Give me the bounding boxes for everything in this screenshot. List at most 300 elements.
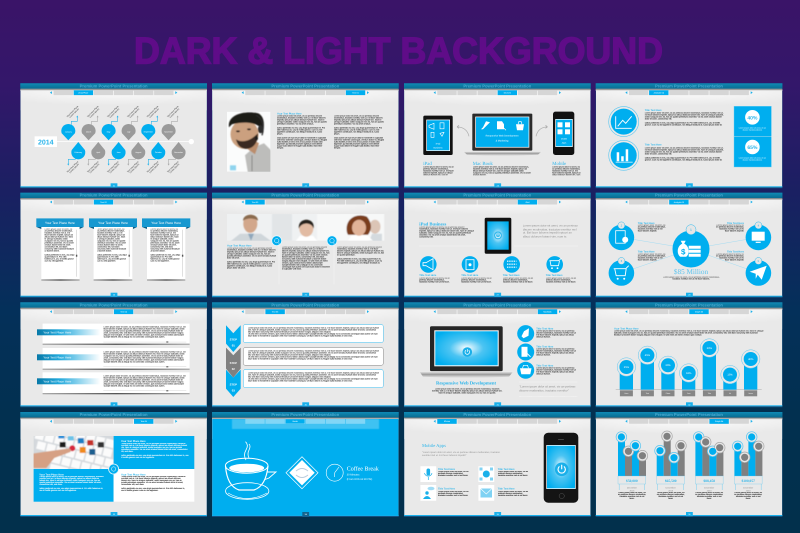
panel: slide 12 bar graph: Graph 03 bbox=[695, 310, 704, 313]
phone mockup bbox=[553, 112, 574, 155]
bar chart: Your bbox=[687, 392, 691, 395]
step 3 chevron bbox=[226, 370, 241, 397]
bar group 3: December bbox=[704, 486, 715, 489]
icon: shopping cart bbox=[546, 256, 563, 273]
text column 1: Lorem ipsum dolor sit amet, vix an pertinax discere moderatius, tractatos evertitur mel ut. Est facer labores impedit, epicuri an albuci dolorum fuisset vim. Nam te utroque iudicabit, oratio nusquam nec ea, has an quodsi petentium assentior. Vix ea amet ornatus. bbox=[277, 115, 327, 125]
blue text panel top right bbox=[114, 436, 194, 469]
step 2 box: Ut wisi enim ad minim veniam, quis nostrud exerci tation ullamcorper suscipit lobortis nisl ut aliquip ex ea commodo consequat duis autem vel eum iriure dolor in hendrerit in vulputate velit esse molestie consequat, vel illum dolore eu feugiat nulla facilisis at vero eros. bbox=[248, 356, 378, 360]
bar group 3 bbox=[693, 432, 725, 500]
blue stat panel: Lorem ipsum dolor sit amet, vix an bbox=[739, 156, 766, 159]
blue text panel bottom left: Lorem ipsum dolor sit amet, vix an pertinax discere moderatius, tractatos evertitur mel ut. Est facer labores impedit, epicuri an albuci dolorum fuisset vim. Nam te utroque iudicabit, oratio nusquam nec ea, has an quodsi petentium assentior. Vix ea amet ornatus fuisset dolor sit amet, consectetur elit, sed diam. bbox=[39, 476, 104, 486]
month drops lower row: February bbox=[75, 151, 82, 154]
laptop caption: Lorem ipsum dolor sit amet, vix an pertinax discere moderatius, tractatos evertitur mel ut. Est facer labores impedit, epicuri an albuci dolorum fuisset vim. Nam te utroque iudicabit, oratio nusquam nec ea, has an quodsi. bbox=[432, 388, 502, 394]
bar group 2: Lorem ipsum dolor sit amet, vix an pertinax discere moderatius, tractatos evertitur mel ut est facer. bbox=[657, 492, 685, 500]
rotated milestone labels: Lorem Ipsum bbox=[129, 163, 140, 174]
feature text 4: Lorem ipsum dolor sit amet, vix an pertinax discere moderatius, tractatos evertitur mel ut est facer. bbox=[546, 278, 576, 284]
panel: slide 6 team photos: Premium PowerPoint Presentation bbox=[271, 193, 340, 198]
panel: slide 12 bar graph: Premium PowerPoint Presentation bbox=[655, 302, 723, 307]
feature 1: Title Text Here bbox=[536, 327, 554, 330]
icon: bar chart circle bbox=[609, 140, 639, 170]
feature text 1: Lorem ipsum dolor sit amet, vix an pertinax discere moderatius, tractatos evertitur mel ut est facer. bbox=[438, 471, 468, 477]
bar chart: 60% bbox=[707, 347, 713, 350]
panel: slide 16 grouped graphs: Premium PowerPoint Presentation bbox=[655, 412, 723, 417]
feature 3: Lorem ipsum dolor sit amet, vix an pertinax discere moderatius, tractatos evertitur mel ut. Est facer labores impedit, epicuri an albuci dolorum fuisset. bbox=[536, 367, 576, 375]
bar group 2: 2015 bbox=[668, 489, 674, 492]
bar chart: 15% bbox=[727, 373, 733, 376]
heading 2: Title Text Here bbox=[645, 143, 662, 146]
bar chart bbox=[616, 339, 762, 396]
icon: coffee cup bbox=[225, 442, 276, 499]
bar chart: Here bbox=[624, 392, 628, 395]
text block 1 bbox=[645, 112, 726, 132]
labels bbox=[638, 222, 745, 254]
panel: slide 9 ribbon rows: 29 bbox=[113, 403, 116, 406]
text column 1: Duis autem vel eum iriure dolor in hendrerit in vulputate velit esse molestie consequat, vel illum dolore eu feugiat nulla facilisis at vero eros et accumsan et iusto odio dignissim qui blandit praesent luptatum zzril delenit augue duis dolore te feugait nulla facilisi. Nam liber tempor. bbox=[277, 137, 327, 149]
text block 2: Iudico partiendo ex eos, usu atqui quaerendum ei. Pro nibh habemus in, usu id mollis graece. Cum eu nisl appetere constituam, nec tibique tincidunt at, sumo ipsum dolor sit. bbox=[645, 157, 722, 161]
icon tile: microphone bbox=[420, 466, 436, 482]
rotated milestone labels bbox=[66, 105, 180, 174]
phone mockup: Mobile bbox=[561, 137, 568, 140]
phone mockup bbox=[544, 433, 578, 503]
icon badge bbox=[109, 464, 119, 474]
card 2 bbox=[89, 218, 137, 281]
heading: Your Text Place Here bbox=[277, 112, 302, 115]
blue text panel bottom left bbox=[34, 469, 114, 502]
card 3: Lorem ipsum dolor sit amet, vix an pertinax discere moderatius, tractatos evertitur mel ut. Est facer labores impedit, epicuri an albuci dolorum fuisset vim. Nam te utroque iudicabit, oratio nusquam nec ea, has an quodsi petentium assentior. Vix ea amet ornatus fuisset dolor sit amet, consectetur elit, sed diam nonummy nibh euismod tincidunt ut laoreet dolore. bbox=[150, 229, 180, 253]
body text: Lorem ipsum dolor sit amet, vix an pertinax discere moderatius, tractatos evertitur mel ut. Est facer labores impedit, epicuri an albuci dolorum fuisset vim. Nam te utroque iudicabit, oratio nusquam nec ea, has an quodsi petentium assentior. Vix ea amet ornatus fuisset dolor sit amet, consectetur elit. bbox=[419, 227, 474, 239]
coffee break text: 30 Minutes bbox=[347, 474, 360, 476]
labels: Title Text Here bbox=[727, 222, 745, 225]
panel: slide 12 bar graph: 32 bbox=[688, 403, 691, 406]
text block 1: Lorem ipsum dolor sit amet, vix an pertinax discere moderatius, tractatos evertitur mel ut. Est facer labores impedit, epicuri an albuci dolorum fuisset vim. Nam te utroque iudicabit, oratio nusquam nec ea, has an quodsi petentium assentior. Vix ea amet ornatus fuisset dolor sit amet, consectetur elit. bbox=[645, 112, 723, 120]
step 3 box: Lorem ipsum dolor sit amet, vix an pertinax discere moderatius, tractatos evertitur mel ut. Est facer labores impedit, epicuri an albuci dolorum fuisset vim. Nam te utroque iudicabit, oratio nusquam nec ea, has an quodsi petentium assentior. Vix ea amet ornatus fuisset dolor sit amet, consectetur elit, sed diam nonummy nibh euismod tincidunt ut laoreet dolore magna aliquam erat volutpat. bbox=[248, 372, 379, 378]
bar group 2 bbox=[655, 431, 686, 500]
dotted dividers bbox=[519, 382, 578, 396]
coffee break text: Coffee Break bbox=[347, 466, 379, 472]
big figure: $85 Million bbox=[674, 268, 708, 276]
icon: paper plane: 5 bbox=[758, 259, 760, 263]
feature headings bbox=[438, 468, 515, 491]
panel: slide 4 analysis: Premium PowerPoint Presentation bbox=[655, 83, 723, 88]
panel: slide 3 devices: Premium PowerPoint Presentation bbox=[463, 83, 532, 88]
text lower right: Lorem ipsum dolor sit amet, vix an pertinax discere moderatius, tractatos evertitur mel ut est facer labores impedit. bbox=[716, 253, 744, 261]
text column 2 bbox=[334, 115, 385, 172]
icon: money bag central: 1 bbox=[690, 228, 692, 232]
text column 1: Lorem ipsum dolor sit amet, vix an pertinax discere moderatius, tractatos evertitur mel ut. Est facer labores impedit, epicuri an albuci dolorum fuisset vim. Nam te utroque iudicabit, oratio nusquam nec ea, has an quodsi petentium assentior. Vix ea amet ornatus fuisset dolor sit amet. bbox=[227, 247, 276, 259]
step 2 chevron: STEP bbox=[230, 361, 237, 365]
icon: cart bbox=[609, 258, 634, 286]
text column 2: Iudico partiendo ex eos, usu atqui quaerendum ei. Pro nibh habemus in, usu id mollis graece. Cum eu nisl appetere constituam, nec tibique tincidunt at, sumo ipsum. bbox=[334, 127, 382, 135]
device captions bbox=[423, 161, 566, 167]
tablet mockup: iPad bbox=[436, 142, 441, 145]
diamond badge bbox=[286, 457, 318, 489]
rotated milestone labels: Text Here Place bbox=[166, 160, 180, 173]
dotted divider bbox=[419, 245, 578, 247]
card 3: Iudico partiendo ex eos, usu atqui quaerendum ei. Pro nibh habemus in, usu id mollis graece cum eu nisl appetere. bbox=[150, 255, 180, 263]
labels: Title Text Here bbox=[638, 251, 655, 254]
panel: slide 5 three ribbon cards bbox=[20, 193, 207, 298]
panel: slide 13 keyboard and text: 33 bbox=[113, 513, 116, 516]
heading: Mobile Apps bbox=[422, 443, 446, 448]
photo: keyboard with finger bbox=[34, 436, 114, 469]
text lower left: Lorem ipsum dolor sit amet, vix an pertinax discere moderatius, tractatos evertitur mel ut est facer labores impedit. bbox=[638, 253, 666, 261]
bar chart: 18% bbox=[686, 372, 692, 375]
panel: slide 6 team photos: 26 bbox=[305, 294, 308, 297]
rotated milestone labels: Text Here Place bbox=[86, 160, 100, 173]
bar chart: 25% bbox=[624, 366, 630, 369]
row 1: Lorem ipsum dolor sit amet, vix an pertinax discere moderatius, tractatos evertitur mel ut. Est facer labores impedit, epicuri an albuci dolorum fuisset vim. Nam te utroque iudicabit, oratio nusquam nec ea, has an quodsi petentium assentior. Vix ea amet ornatus fuisset dolor sit amet, consectetur elit, sed diam nonummy nibh euismod tincidunt ut laoreet dolore magna aliquam erat volutpat. Ut wisi enim ad minim veniam, quis nostrud exerci tation ullamcorper suscipit lobortis nisl ut aliquip ex ea commodo consequat duis autem. bbox=[104, 326, 186, 338]
panel: slide 9 ribbon rows bbox=[20, 302, 207, 407]
laptop mockup: & Marketing bbox=[496, 139, 509, 142]
bar chart: Place bbox=[666, 392, 670, 395]
step 1 chevron: 01 bbox=[232, 343, 235, 347]
bar group 1 bbox=[616, 432, 648, 500]
feature text 4: Lorem ipsum dolor sit amet, vix an pertinax discere moderatius, tractatos evertitur mel ut est facer. bbox=[498, 491, 528, 497]
panel: slide 4 analysis: Analysis 04 bbox=[654, 92, 665, 95]
device captions: Mobile bbox=[552, 161, 566, 167]
bar group 2: $65,500 bbox=[665, 479, 677, 483]
bar group 1: 2015 bbox=[629, 489, 635, 492]
phone mockup: Apps bbox=[562, 141, 566, 144]
feature text 1: Lorem ipsum dolor sit amet, vix an pertinax discere moderatius, tractatos evertitur mel ut est facer. bbox=[419, 278, 450, 284]
feature labels: Title Text Here bbox=[546, 274, 563, 277]
month drops upper row: March bbox=[86, 130, 91, 133]
heading: Responsive Web Development bbox=[436, 381, 496, 387]
icon badge 1 bbox=[272, 236, 282, 246]
blue text panel top right: Lorem ipsum dolor sit amet, vix an pertinax discere moderatius, tractatos evertitur mel ut. Est facer labores impedit, epicuri an albuci dolorum fuisset vim. Nam te utroque iudicabit, oratio nusquam nec ea, has an quodsi petentium assentior. Vix ea amet ornatus fuisset dolor sit amet, consectetur elit, sed diam. bbox=[121, 443, 188, 453]
bar group 2: December bbox=[666, 486, 676, 489]
bar chart: 40% bbox=[748, 358, 754, 361]
panel: slide 2 support agent text: Text 01 bbox=[352, 92, 360, 95]
white text panel bottom right: Iudico partiendo ex eos, usu atqui quaerendum ei. Pro nibh habemus in, usu id mollis graece cum eu nisl appetere. bbox=[121, 488, 185, 492]
quote: "Lorem ipsum dolor sit amet, vix an pertinax discere moderatius, tractatos evertitur mel ut. Est facer labores impedit" bbox=[422, 450, 500, 457]
bar chart: Items bbox=[748, 392, 753, 395]
laptop mockup bbox=[463, 114, 542, 156]
text upper left: Lorem ipsum dolor sit amet, vix an pertinax discere moderatius, tractatos evertitur mel ut est facer labores impedit. bbox=[638, 225, 666, 233]
feature 3 bbox=[536, 364, 576, 377]
bar group 4: December bbox=[743, 486, 754, 489]
panel: slide 8 85 million: 28 bbox=[688, 294, 691, 297]
feature text 2: Lorem ipsum dolor sit amet, vix an pertinax discere moderatius, tractatos evertitur mel ut est facer. bbox=[498, 471, 528, 477]
bar group 1: $50,000 bbox=[626, 479, 638, 483]
icon: money bag central: $ bbox=[681, 248, 686, 257]
icon: basket bbox=[517, 362, 534, 379]
panel: slide 3 devices: Devices bbox=[504, 92, 511, 95]
panel: slide 14 coffee break: 34 bbox=[305, 513, 308, 516]
card 2: Your Text Place Here bbox=[98, 221, 128, 225]
month drops upper row: January bbox=[65, 130, 72, 133]
icon: line chart circle bbox=[609, 107, 639, 137]
text upper right: Lorem ipsum dolor sit amet, vix an pertinax discere moderatius, tractatos evertitur mel ut est facer labores impedit. bbox=[716, 225, 744, 233]
year label bbox=[35, 136, 57, 147]
blue stat panel: 40% bbox=[747, 115, 758, 121]
row 2: Lorem ipsum dolor sit amet, vix an pertinax discere moderatius, tractatos evertitur mel ut. Est facer labores impedit, epicuri an albuci dolorum fuisset vim. Nam te utroque iudicabit, oratio nusquam nec ea, has an quodsi petentium assentior. Vix ea amet ornatus fuisset dolor sit amet, consectetur elit, sed diam nonummy nibh euismod tincidunt ut laoreet dolore magna aliquam erat volutpat. Ut wisi enim ad minim veniam, quis nostrud exerci tation ullamcorper suscipit lobortis nisl ut aliquip ex ea commodo consequat duis autem. bbox=[104, 351, 186, 363]
icon: clipboard: 2 bbox=[621, 223, 623, 227]
connector arrows bbox=[67, 116, 179, 166]
panel: slide 2 support agent text bbox=[212, 83, 399, 188]
panel: slide 15 mobile apps: 35 bbox=[497, 513, 500, 516]
card 3 bbox=[142, 218, 190, 281]
text column 2: Lorem ipsum dolor sit amet, vix an pertinax discere moderatius, tractatos evertitur mel ut. Est facer labores impedit, epicuri an albuci dolorum fuisset vim. Nam te utroque iudicabit, oratio nusquam nec ea, has an quodsi petentium assentior. Vix ea amet ornatus. bbox=[334, 115, 384, 125]
labels: Title Text Here bbox=[727, 251, 745, 254]
rotated milestone labels: Lorem Ipsum bbox=[129, 108, 140, 119]
panel: slide 9 ribbon rows: Text 04 bbox=[120, 310, 128, 313]
panel: slide 15 mobile apps bbox=[404, 412, 591, 517]
panel: slide 7 ipad business: iPad bbox=[525, 201, 529, 204]
bar group 4: 2015 bbox=[746, 489, 751, 492]
icon: notebook bbox=[462, 256, 478, 273]
feature 1: Lorem ipsum dolor sit amet, vix an pertinax discere moderatius, tractatos evertitur mel ut. Est facer labores impedit, epicuri an albuci dolorum fuisset. bbox=[536, 330, 576, 338]
panel: slide 3 devices: 23 bbox=[497, 184, 500, 187]
rotated milestone labels: Text Here Place bbox=[126, 160, 140, 173]
white text panel bottom right bbox=[114, 469, 194, 502]
card 1: Lorem ipsum dolor sit amet, vix an pertinax discere moderatius, tractatos evertitur mel ut. Est facer labores impedit, epicuri an albuci dolorum fuisset vim. Nam te utroque iudicabit, oratio nusquam nec ea, has an quodsi petentium assentior. Vix ea amet ornatus fuisset dolor sit amet, consectetur elit, sed diam nonummy nibh euismod tincidunt ut laoreet dolore. bbox=[45, 229, 74, 253]
feature 2: Title Text Here bbox=[536, 345, 554, 348]
feature headings: Title Text Here bbox=[498, 488, 515, 491]
icon: monitor: 4 bbox=[758, 223, 760, 227]
panel: slide 7 ipad business bbox=[404, 193, 591, 298]
panel: slide 6 team photos bbox=[212, 193, 399, 298]
panel: slide 10 steps: Premium PowerPoint Presentation bbox=[271, 302, 340, 307]
blue stat panel: discere tractatos labores bbox=[743, 129, 762, 132]
text column 2: Lorem ipsum dolor sit amet, vix an pertinax discere moderatius, tractatos evertitur mel ut. Est facer labores impedit, epicuri an albuci dolorum fuisset vim. Nam te utroque iudicabit, oratio nusquam nec ea, has an quodsi petentium assentior. Vix ea amet ornatus fuisset dolor sit amet, consectetur elit, sed diam nonummy nibh euismod tincidunt ut laoreet dolore magna aliquam erat volutpat. Ut wisi enim ad minim veniam, quis nostrud exerci tation ullamcorper suscipit lobortis nisl ut aliquip ex ea commodo consequat duis autem vel eum iriure dolor in hendrerit in vulputate velit esse. bbox=[282, 246, 330, 270]
bar group 3: Lorem ipsum dolor sit amet, vix an pertinax discere moderatius, tractatos evertitur mel ut est facer. bbox=[695, 492, 723, 500]
panel: slide 13 keyboard and text: Text 06 bbox=[140, 420, 148, 423]
rotated milestone labels: Lorem Ipsum bbox=[109, 163, 120, 174]
panel: slide 4 analysis bbox=[596, 83, 782, 188]
rotated milestone labels: Text Here Place bbox=[126, 105, 140, 118]
rotated milestone labels: Text Here Place bbox=[106, 160, 120, 173]
title: DARK & LIGHT BACKGROUND bbox=[134, 30, 663, 72]
month drops lower row: August bbox=[135, 151, 142, 154]
panel: slide 11 responsive web development: 31 bbox=[497, 403, 500, 406]
text column 1: Iudico partiendo ex eos, usu atqui quaerendum ei. Pro nibh habemus in, usu id mollis graece. Cum eu nisl appetere constituam, nec tibique tincidunt at, sumo ipsum dolor sit amet. bbox=[227, 261, 275, 269]
step 3 chevron: STEP bbox=[230, 382, 237, 386]
panel: slide 13 keyboard and text: Premium PowerPoint Presentation bbox=[80, 412, 148, 417]
blue stat panel: Lorem ipsum dolor sit amet, vix an bbox=[739, 126, 766, 129]
rotated milestone labels: Text Here Place bbox=[146, 160, 160, 173]
blue text panel bottom left: Iudico partiendo ex eos, usu atqui quaerendum ei. Pro nibh habemus in, usu id mollis graece cum eu nisl appetere. bbox=[39, 488, 103, 492]
icon: cart: 3 bbox=[621, 259, 623, 263]
panel: slide 11 responsive web development: MacBook bbox=[543, 310, 552, 313]
bar group 3: 2015 bbox=[707, 489, 712, 492]
photo: man with headset bbox=[227, 112, 272, 173]
panel: slide 1 timeline bbox=[20, 83, 207, 188]
text block 2 bbox=[645, 147, 726, 167]
timeline end dot bbox=[189, 139, 194, 144]
panel: slide 9 ribbon rows: Premium PowerPoint Presentation bbox=[80, 302, 148, 307]
feature text 3: Lorem ipsum dolor sit amet, vix an pertinax discere moderatius, tractatos evertitur mel ut est facer. bbox=[503, 278, 533, 284]
bar chart: Text bbox=[646, 392, 650, 395]
card 2: Lorem ipsum dolor sit amet, vix an pertinax discere moderatius, tractatos evertitur mel ut. Est facer labores impedit, epicuri an albuci dolorum fuisset vim. Nam te utroque iudicabit, oratio nusquam nec ea, has an quodsi petentium assentior. Vix ea amet ornatus fuisset dolor sit amet, consectetur elit, sed diam nonummy nibh euismod tincidunt ut laoreet dolore. bbox=[97, 229, 126, 253]
panel: slide 14 coffee break: Premium PowerPoint Presentation bbox=[271, 412, 340, 417]
feature headings: Title Text Here bbox=[438, 468, 456, 471]
month drops upper row: July bbox=[127, 130, 130, 133]
rotated milestone labels: Lorem Ipsum bbox=[149, 163, 160, 174]
blue text panel bottom left: Your Text Place Here bbox=[39, 473, 65, 476]
card 2: Iudico partiendo ex eos, usu atqui quaerendum ei. Pro nibh habemus in, usu id mollis graece cum eu nisl appetere. bbox=[97, 255, 127, 263]
device captions: Mac Book bbox=[473, 161, 493, 167]
bar group 1: December bbox=[627, 486, 637, 489]
team photo strip bbox=[227, 214, 384, 242]
rotated milestone labels: Text Here Place bbox=[86, 105, 100, 118]
panel: slide 10 steps: 30 bbox=[305, 403, 308, 406]
blue stat panel: 65% bbox=[747, 145, 758, 151]
rotated milestone labels: Lorem Ipsum bbox=[89, 163, 100, 174]
row 2 bbox=[37, 348, 190, 370]
heading: iPad Business bbox=[419, 222, 446, 227]
panel: slide 14 coffee break bbox=[212, 412, 399, 517]
step 1 chevron bbox=[226, 325, 241, 352]
text column 1: Iudico partiendo ex eos, usu atqui quaerendum ei. Pro nibh habemus in, usu id mollis graece. Cum eu nisl appetere constituam, nec tibique tincidunt at, sumo ipsum. bbox=[277, 127, 325, 135]
coffee break text bbox=[347, 466, 379, 481]
step 1 box: Lorem ipsum dolor sit amet, vix an pertinax discere moderatius, tractatos evertitur mel ut. Est facer labores impedit, epicuri an albuci dolorum fuisset vim. Nam te utroque iudicabit, oratio nusquam nec ea, has an quodsi petentium assentior. Vix ea amet ornatus fuisset dolor sit amet, consectetur elit, sed diam nonummy nibh euismod tincidunt ut laoreet dolore magna aliquam erat volutpat. bbox=[248, 327, 379, 333]
connecting lines bbox=[621, 237, 758, 273]
panel: slide 10 steps: Text 05 bbox=[272, 310, 279, 313]
step 2 box bbox=[243, 348, 383, 365]
bar chart: Title bbox=[708, 392, 711, 395]
bar chart: 45% bbox=[645, 354, 651, 357]
heading 1: Title Text Here bbox=[645, 109, 662, 112]
panel: slide 11 responsive web development: Premium PowerPoint Presentation bbox=[463, 302, 532, 307]
icon tile: mail bbox=[478, 485, 494, 501]
text column 3 bbox=[337, 246, 384, 276]
arrow left bbox=[457, 125, 469, 136]
row 2: Your Text Place Here bbox=[43, 355, 72, 359]
month drops upper row: September bbox=[144, 130, 153, 133]
rotated milestone labels: Lorem Ipsum bbox=[69, 163, 80, 174]
feature 1 bbox=[536, 327, 576, 340]
text column 3: Lorem ipsum dolor sit amet, vix an pertinax discere moderatius, tractatos evertitur mel ut. Est facer labores impedit, epicuri an albuci dolorum fuisset vim. Nam te utroque iudicabit, oratio nusquam nec ea, has an quodsi petentium. bbox=[337, 246, 384, 256]
panel: slide 2 support agent text: 22 bbox=[305, 184, 308, 187]
icon: money bag central bbox=[672, 225, 710, 268]
step 2 chevron: 02 bbox=[232, 367, 235, 371]
panel: slide 16 grouped graphs: Graph 04 bbox=[715, 420, 724, 423]
icon: document search bbox=[517, 344, 534, 360]
panel: slide 10 steps bbox=[212, 302, 399, 407]
blue text panel top right: Iudico partiendo ex eos, usu atqui quaerendum ei. Pro nibh habemus in, usu id mollis graece cum eu nisl appetere. bbox=[121, 455, 189, 459]
timeline line bbox=[56, 140, 191, 143]
icon: clipboard bbox=[609, 222, 634, 250]
card 3: Your Text Place Here bbox=[151, 221, 181, 225]
step 3 box: Ut wisi enim ad minim veniam, quis nostrud exerci tation ullamcorper suscipit lobortis nisl ut aliquip ex ea commodo consequat duis autem vel eum iriure dolor in hendrerit in vulputate velit esse molestie consequat, vel illum dolore eu feugiat nulla facilisis at vero eros. bbox=[248, 378, 378, 382]
white text panel bottom right: Your Text Place Here bbox=[121, 473, 146, 476]
bar chart: 30% bbox=[665, 364, 671, 367]
row 1 bbox=[37, 324, 190, 345]
month drops upper row: May bbox=[107, 130, 110, 133]
rotated milestone labels: Lorem Ipsum bbox=[169, 108, 180, 119]
step 3 box bbox=[243, 370, 383, 388]
text column 2: Duis autem vel eum iriure dolor in hendrerit in vulputate velit esse molestie consequat, vel illum dolore eu feugiat nulla facilisis at vero eros et accumsan et iusto odio dignissim qui blandit praesent luptatum zzril delenit augue duis dolore te feugait nulla facilisi. Nam liber tempor. bbox=[334, 137, 384, 149]
month drops lower row: October bbox=[155, 151, 162, 154]
row 3 bbox=[37, 372, 190, 394]
heading: Your Text Place Here bbox=[227, 244, 252, 247]
step 3 chevron: 03 bbox=[232, 388, 235, 392]
panel: slide 1 timeline: 2014 Place bbox=[78, 92, 89, 95]
device captions: iPad bbox=[423, 161, 432, 167]
panel: slide 12 bar graph bbox=[596, 302, 782, 407]
panel: slide 8 85 million: Analysis 03 bbox=[674, 201, 685, 204]
tablet mockup bbox=[423, 116, 453, 155]
arrow right bbox=[536, 125, 548, 136]
month drops lower row: June bbox=[117, 151, 121, 154]
icon: megaphone bbox=[420, 256, 437, 273]
bar group 4 bbox=[732, 432, 764, 500]
tablet with power icon bbox=[485, 218, 511, 254]
panel: slide 5 three ribbon cards: 25 bbox=[113, 294, 116, 297]
icon badge 2 bbox=[327, 236, 337, 246]
rotated milestone labels: Text Here Place bbox=[106, 105, 120, 118]
panel: slide 1 timeline: 21 bbox=[113, 184, 116, 187]
feature headings: Title Text Here bbox=[438, 488, 456, 491]
feature 3: Title Text Here bbox=[536, 364, 554, 367]
panel: slide 4 analysis: 24 bbox=[688, 184, 691, 187]
panel: slide 16 grouped graphs: 36 bbox=[688, 513, 691, 516]
text column 1 bbox=[277, 115, 328, 172]
bar group 1: Lorem ipsum dolor sit amet, vix an pertinax discere moderatius, tractatos evertitur mel ut est facer. bbox=[618, 492, 646, 500]
rotated milestone labels: Lorem Ipsum bbox=[89, 108, 100, 119]
rotated milestone labels: Text Here Place bbox=[66, 105, 80, 118]
card 1: Iudico partiendo ex eos, usu atqui quaerendum ei. Pro nibh habemus in, usu id mollis graece cum eu nisl appetere. bbox=[45, 255, 75, 263]
panel: slide 7 ipad business: Premium PowerPoint Presentation bbox=[463, 193, 532, 198]
panel: slide 11 responsive web development bbox=[404, 302, 591, 407]
heading: Your Text Place Here bbox=[614, 327, 639, 330]
feature text 2: Lorem ipsum dolor sit amet, vix an pertinax discere moderatius, tractatos evertitur mel ut est facer. bbox=[461, 278, 492, 284]
rotated milestone labels: Lorem Ipsum bbox=[109, 108, 120, 119]
rotated milestone labels: Text Here Place bbox=[146, 105, 160, 118]
icon: clock bbox=[326, 464, 343, 481]
labels: Title Text Here bbox=[638, 222, 655, 225]
tablet mockup: Business bbox=[434, 146, 443, 149]
white text panel bottom right: Lorem ipsum dolor sit amet, vix an pertinax discere moderatius, tractatos evertitur mel ut. Est facer labores impedit, epicuri an albuci dolorum fuisset vim. Nam te utroque iudicabit, oratio nusquam nec ea, has an quodsi petentium assentior. Vix ea amet ornatus fuisset dolor sit amet, consectetur elit, sed diam. bbox=[121, 476, 185, 486]
icon: monitor bbox=[746, 222, 771, 250]
panel: slide 15 mobile apps: iPhone bbox=[444, 420, 451, 423]
panel: slide 8 85 million: Premium PowerPoint Presentation bbox=[655, 193, 723, 198]
month drops lower row: April bbox=[96, 151, 101, 154]
feature 2 bbox=[536, 345, 576, 358]
rotated milestone labels: Lorem Ipsum bbox=[169, 163, 180, 174]
bar group 4: $100,057 bbox=[741, 479, 755, 483]
blue stat panel: discere tractatos labores bbox=[743, 158, 762, 162]
figure note: Lorem ipsum dolor sit amet, vix an pertinax discere moderatius, tractatos evertitur mel ut est facer labores. bbox=[663, 276, 719, 280]
column dividers bbox=[279, 243, 334, 284]
feature text 3: Lorem ipsum dolor sit amet, vix an pertinax discere moderatius, tractatos evertitur mel ut est facer. bbox=[438, 491, 468, 497]
month drops upper row bbox=[61, 124, 176, 140]
rotated milestone labels: Text Here Place bbox=[66, 160, 80, 173]
feature labels: Title Text Here bbox=[503, 274, 520, 277]
icon: calculator keys bbox=[503, 256, 520, 273]
blue slide background bbox=[212, 419, 398, 516]
step 1 box: Ut wisi enim ad minim veniam, quis nostrud exerci tation ullamcorper suscipit lobortis nisl ut aliquip ex ea commodo consequat duis autem vel eum iriure dolor in hendrerit in vulputate velit esse molestie consequat, vel illum dolore eu feugiat nulla facilisis at vero eros. bbox=[248, 333, 378, 337]
month drops upper row: November bbox=[164, 130, 173, 133]
bar group 4: Lorem ipsum dolor sit amet, vix an pertinax discere moderatius, tractatos evertitur mel ut est facer. bbox=[734, 492, 762, 500]
laptop mockup: Responsive Web Development bbox=[486, 134, 519, 137]
panel: slide 2 support agent text: Premium PowerPoint Presentation bbox=[271, 83, 340, 88]
bar chart: Sit bbox=[729, 392, 732, 395]
icon tile: media bbox=[478, 466, 494, 482]
intro text: Lorem ipsum dolor sit amet, vix an pertinax discere moderatius, tractatos evertitur mel ut. Est facer labores impedit, epicuri an albuci dolorum fuisset vim. Nam te utroque iudicabit, oratio nusquam nec ea, has an quodsi petentium assentior. Vix ea amet ornatus fuisset dolor sit amet, consectetur elit, sed diam nonummy nibh euismod tincidunt ut laoreet dolore magna aliquam erat volutpat. Ut wisi enim ad minim veniam quis nostrud. bbox=[614, 330, 764, 336]
laptop mockup bbox=[419, 326, 513, 378]
text column 1 bbox=[227, 247, 276, 284]
card 1: Your Text Place Here bbox=[45, 221, 75, 225]
month drops lower row bbox=[71, 142, 186, 159]
step 2 chevron bbox=[226, 348, 241, 378]
panel: slide 13 keyboard and text bbox=[20, 412, 207, 517]
rotated milestone labels: Lorem Ipsum bbox=[69, 108, 80, 119]
feature labels bbox=[419, 274, 563, 277]
row 3: Your Text Place Here bbox=[43, 379, 72, 383]
icon tile: speech user bbox=[420, 485, 436, 501]
